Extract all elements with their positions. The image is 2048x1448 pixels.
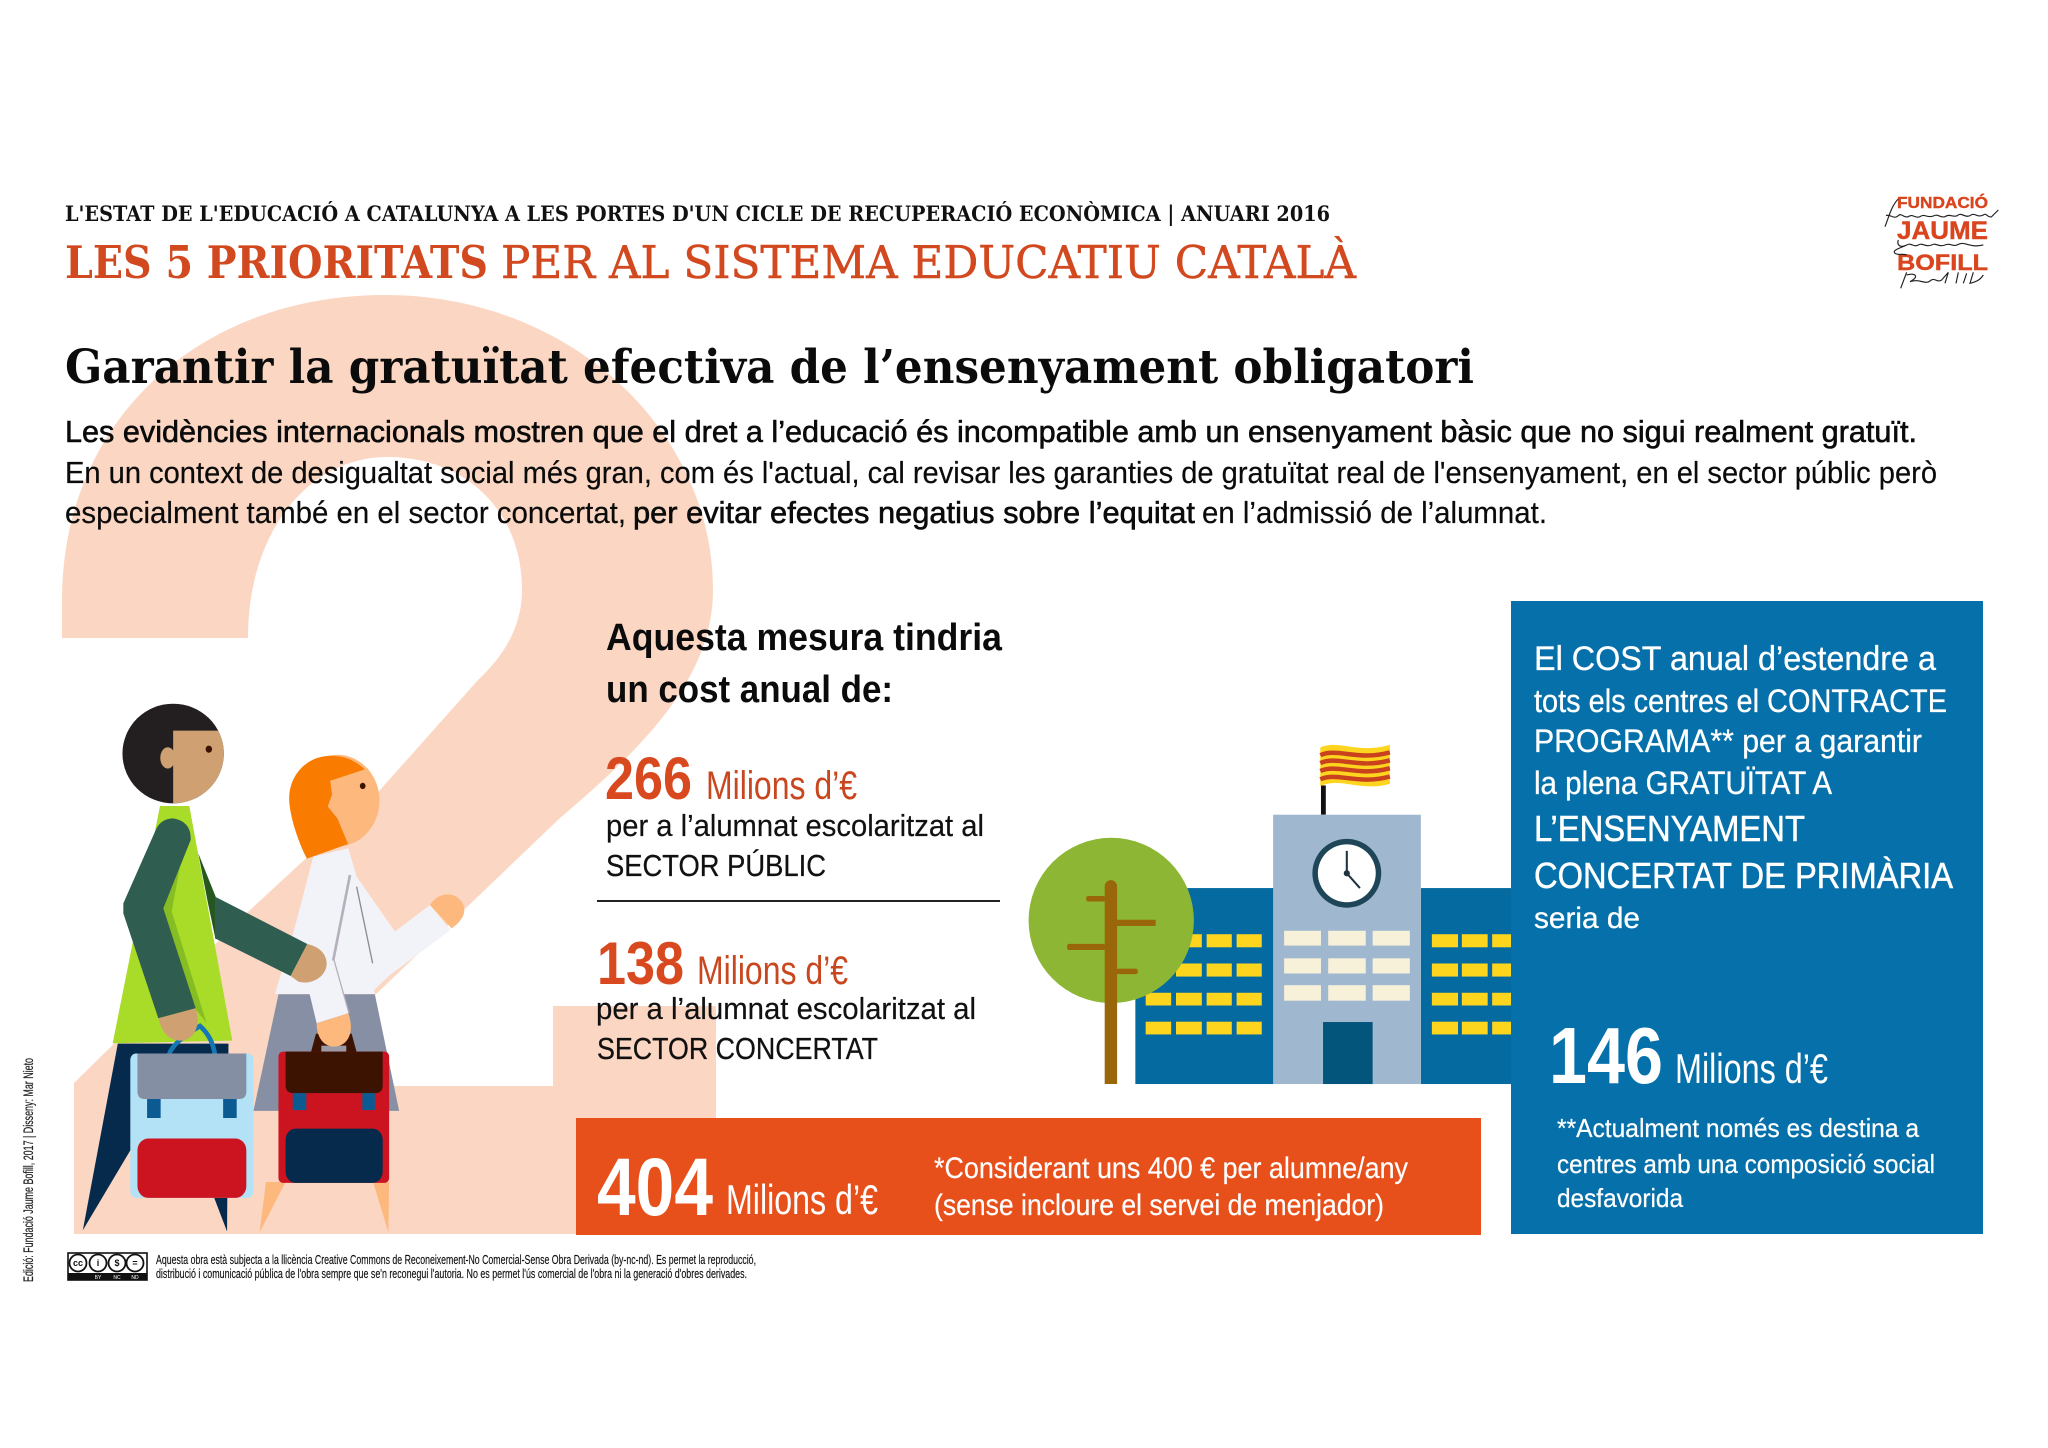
panel: contracte programa cost: seria de (1534, 902, 1640, 935)
panel: contracte programa cost: CONCERTAT DE PRIMÀRIA (1534, 855, 1953, 896)
clock tower (1273, 815, 1421, 1084)
panel: contracte programa cost: 146 (1549, 1011, 1663, 1100)
public sector cost: 266 (605, 745, 692, 812)
icon: creative commons badge: ND (131, 1275, 139, 1281)
man (83, 704, 327, 1231)
cost heading (606, 617, 1003, 711)
panel: total cost: *Considerant uns 400 € per alumne/any (934, 1152, 1408, 1185)
intro paragraph: Les evidències internacionals mostren que el dret a l’educació és incompatible amb un ensenyament bàsic que no sigui realment gratuït. (65, 414, 1917, 449)
panel: total cost: 404 (597, 1142, 713, 1233)
panel: contracte programa cost: Milions d’€ (1675, 1045, 1828, 1092)
icon: creative commons badge: $ (114, 1258, 120, 1268)
intro paragraph: per evitar efectes negatius sobre l’equitat (633, 495, 1195, 530)
icon: creative commons badge: BY (95, 1275, 102, 1281)
logo: Fundació Jaume Bofill: JAUME (1897, 217, 1988, 245)
icon: creative commons badge: i (97, 1258, 99, 1268)
subsidised sector cost: 138 (597, 930, 684, 997)
panel: contracte programa cost (1511, 601, 1983, 1234)
panel: contracte programa cost: tots els centres el CONTRACTE (1534, 683, 1947, 719)
panel: contracte programa cost: centres amb una composició social (1557, 1149, 1935, 1179)
flag (1320, 745, 1390, 815)
credits: vertical edition text: Edició: Fundació Jaume Bofill, 2017 | Disseny: Mar Nieto (20, 1058, 36, 1282)
panel: total cost: (sense incloure el servei de menjador) (934, 1189, 1384, 1222)
big background numeral 2 (62, 295, 716, 1234)
main title: LES 5 PRIORITATS (65, 236, 488, 289)
intro paragraph: En un context de desigualtat social més gran, com és l'actual, cal revisar les garanties de gratuïtat real de l'ensenyament, en el sector públic però (65, 455, 1937, 490)
panel: contracte programa cost: la plena GRATUÏTAT A (1534, 765, 1833, 801)
icon: creative commons badge: NC (113, 1275, 121, 1281)
subsidised sector cost: SECTOR CONCERTAT (597, 1031, 878, 1066)
backpack: blue (130, 1008, 253, 1198)
main title (65, 236, 1356, 289)
illustration: school building with tree and flag (1029, 745, 1513, 1084)
intro paragraph: en l’admissió de l’alumnat. (1202, 495, 1547, 530)
main title: PER AL SISTEMA EDUCATIU CATALÀ (501, 236, 1356, 289)
subsidised sector cost: Milions d’€ (697, 949, 848, 993)
public sector cost: SECTOR PÚBLIC (606, 848, 826, 883)
panel: contracte programa cost: L’ENSENYAMENT (1534, 808, 1805, 849)
icon: creative commons badge: = (132, 1258, 138, 1268)
wing windows (1146, 934, 1511, 1034)
subsidised sector cost (596, 930, 976, 1066)
icon: creative commons badge (68, 1253, 147, 1281)
license text: Aquesta obra està subjecta a la llicència Creative Commons de Reconeixement-No Comercial-Sense Obra Derivada (by-nc-nd). Es permet la reproducció, (156, 1253, 756, 1267)
public sector cost (605, 745, 984, 883)
section heading: Garantir la gratuïtat efectiva de l’ensenyament obligatori (65, 340, 1474, 395)
logo: Fundació Jaume Bofill: FUNDACIÓ (1897, 193, 1988, 212)
panel: contracte programa cost: desfavorida (1557, 1183, 1684, 1213)
panel: total cost: Milions d’€ (726, 1176, 878, 1223)
license text: distribució i comunicació pública de l'obra sempre que se'n reconegui l'autoria. No es permet l'ús comercial de l'obra ni la generació d'obres derivades. (156, 1267, 747, 1281)
backpack: red (278, 1013, 389, 1183)
intro paragraph: especialment també en el sector concertat, (65, 495, 626, 530)
intro paragraph (65, 414, 1937, 530)
report title line: L'ESTAT DE L'EDUCACIÓ A CATALUNYA A LES PORTES D'UN CICLE DE RECUPERACIÓ ECONÒMICA | ANUARI 2016 (65, 201, 1330, 226)
cost heading: Aquesta mesura tindria (606, 617, 1003, 659)
icon: creative commons badge: cc (73, 1258, 83, 1268)
header (65, 201, 1356, 289)
cost breakdown (596, 617, 1003, 1066)
panel: contracte programa cost: PROGRAMA** per a garantir (1534, 723, 1922, 759)
panel: total cost (576, 1118, 1481, 1235)
public sector cost: Milions d’€ (706, 764, 857, 808)
illustration: two students with backpacks (83, 704, 464, 1233)
license text (156, 1253, 756, 1281)
building wings (1135, 888, 1513, 1084)
subsidised sector cost: per a l’alumnat escolaritzat al (596, 991, 976, 1026)
public sector cost: per a l’alumnat escolaritzat al (606, 808, 984, 843)
logo: Fundació Jaume Bofill (1885, 193, 1998, 288)
girl (253, 755, 464, 1233)
panel: contracte programa cost: **Actualment només es destina a (1557, 1113, 1920, 1143)
panel: contracte programa cost: El COST anual d’estendre a (1534, 640, 1936, 678)
tree (1029, 838, 1194, 1084)
logo: Fundació Jaume Bofill: BOFILL (1897, 250, 1988, 275)
cost heading: un cost anual de: (606, 669, 893, 711)
